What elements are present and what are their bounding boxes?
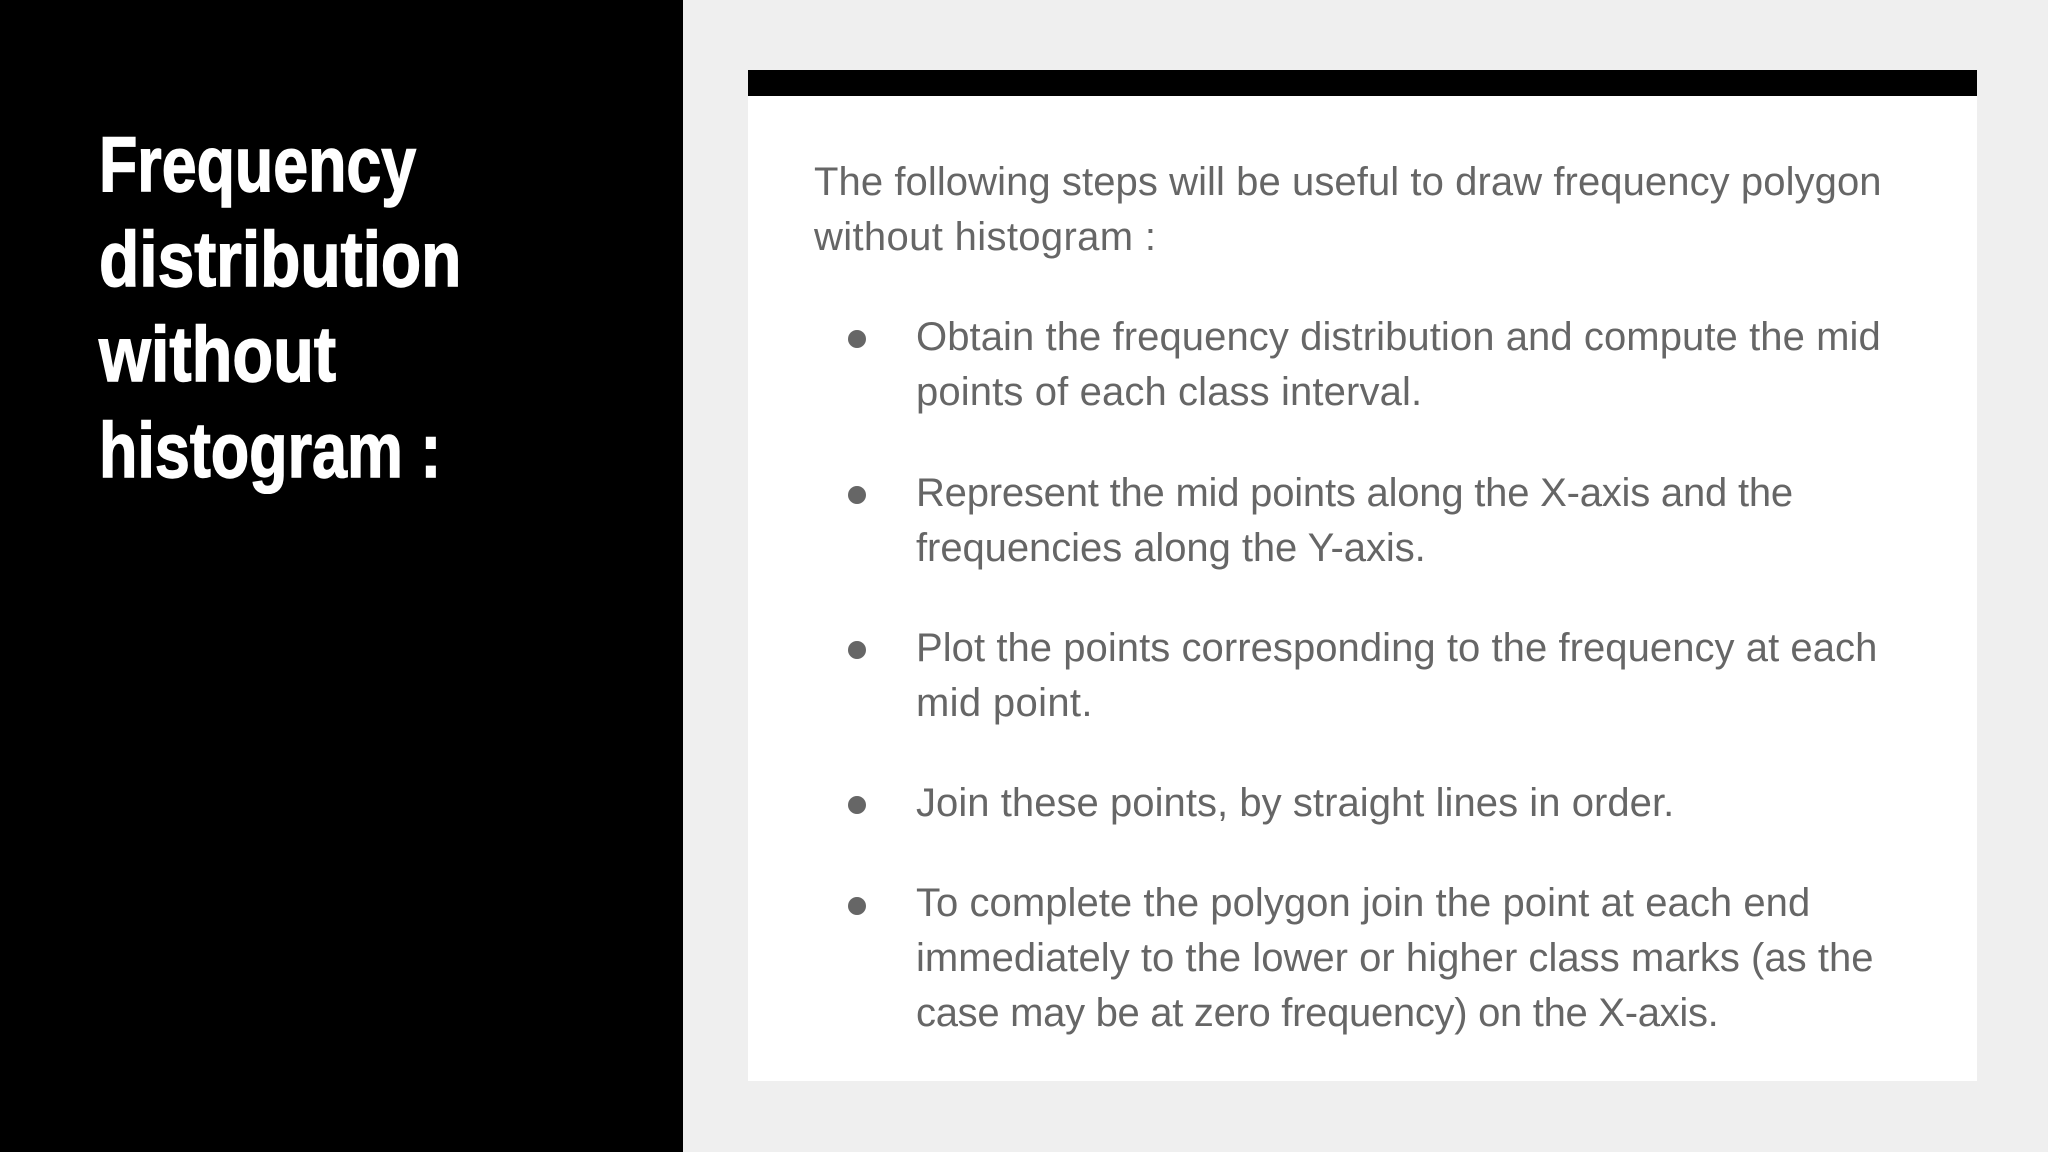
title: distribution xyxy=(99,215,461,303)
title xyxy=(98,120,461,494)
step 3 text: mid point. xyxy=(916,681,1093,725)
intro text: without histogram : xyxy=(814,215,1156,259)
panel: left title panel xyxy=(0,0,683,1152)
title: histogram : xyxy=(99,406,441,494)
step 3 text: Plot the points corresponding to the frequency at each xyxy=(916,626,1877,670)
bullet marker 2 xyxy=(848,486,866,504)
bullet marker 1 xyxy=(848,330,866,348)
bullet marker 5 xyxy=(848,897,866,915)
title: without xyxy=(99,310,336,398)
bullet marker 4 xyxy=(848,796,866,814)
intro text: The following steps will be useful to draw frequency polygon xyxy=(814,160,1882,204)
step 5 text xyxy=(916,881,1874,1035)
step 2 text: Represent the mid points along the X-axis and the xyxy=(916,471,1793,515)
step 1 text: points of each class interval. xyxy=(916,370,1422,414)
card top bar xyxy=(748,70,1977,96)
title: Frequency xyxy=(99,120,416,208)
step 1 text: Obtain the frequency distribution and compute the mid xyxy=(916,315,1881,359)
step 5 text: case may be at zero frequency) on the X-axis. xyxy=(916,991,1718,1035)
step 5 text: To complete the polygon join the point at each end xyxy=(916,881,1810,925)
intro text xyxy=(814,160,1882,259)
step 1 text xyxy=(916,315,1881,414)
step 2 text xyxy=(916,471,1793,570)
step 5 text: immediately to the lower or higher class marks (as the xyxy=(916,936,1874,980)
step 2 text: frequencies along the Y-axis. xyxy=(916,526,1426,570)
step 3 text xyxy=(916,626,1877,725)
step 4 text: Join these points, by straight lines in order. xyxy=(916,781,1674,825)
bullet marker 3 xyxy=(848,641,866,659)
panel: content card xyxy=(748,70,1977,1081)
